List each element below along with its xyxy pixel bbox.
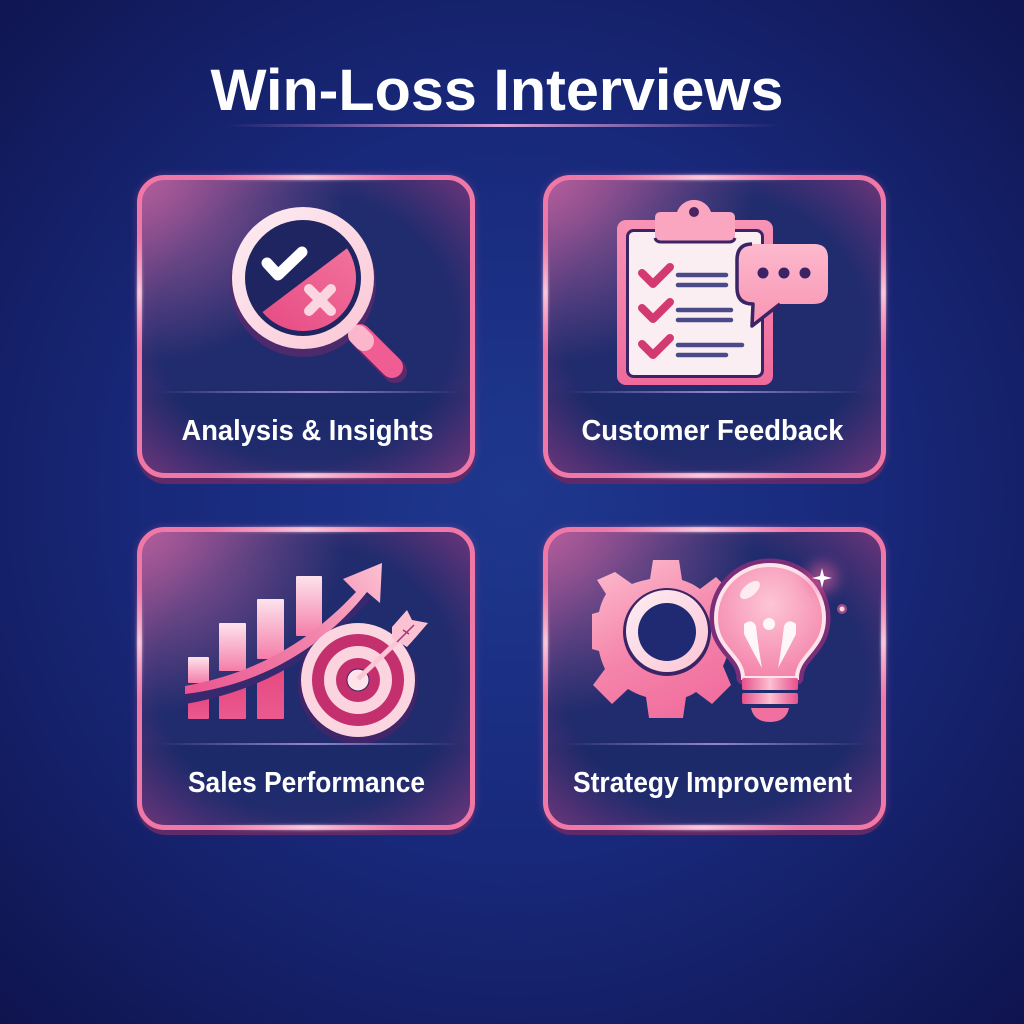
panel: sales performance xyxy=(137,527,475,835)
icon: clipboard checklist xyxy=(617,200,828,385)
panel: customer feedback xyxy=(543,175,886,484)
label: analysis and insights: Analysis & Insights xyxy=(182,415,434,447)
label: sales performance: Sales Performance xyxy=(188,767,425,799)
label: customer feedback: Customer Feedback xyxy=(582,415,844,447)
panel: analysis and insights xyxy=(137,175,475,484)
title: Win-Loss Interviews xyxy=(210,58,784,123)
label: strategy improvement: Strategy Improvement xyxy=(573,767,852,799)
panel: strategy improvement xyxy=(543,527,886,835)
icon: gear and light bulb xyxy=(592,560,847,722)
icon: magnifying glass xyxy=(230,207,395,371)
icon: bar chart with target xyxy=(185,563,428,744)
